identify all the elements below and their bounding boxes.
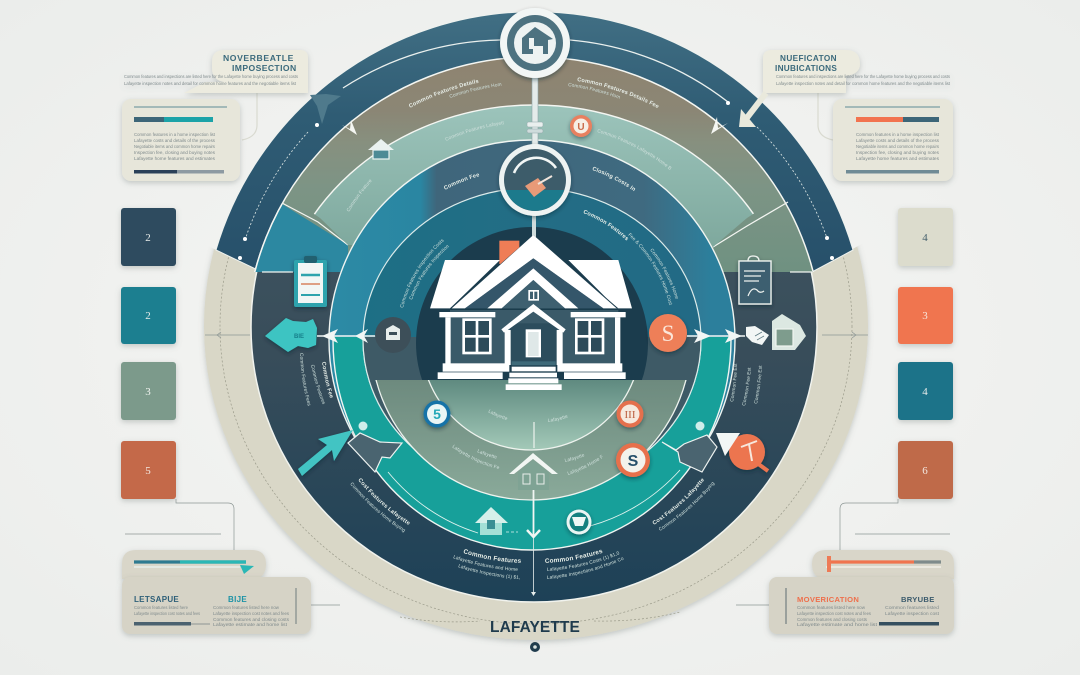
infographic canvas	[118, 6, 958, 652]
top right info card: Inspection fee, closing and buying notes	[856, 150, 940, 155]
icon: coral dollar: S	[662, 321, 674, 346]
icon: handshake	[746, 326, 769, 345]
left number tiles: 3	[145, 386, 151, 398]
icon: slate circle	[375, 317, 411, 353]
top right info card	[833, 99, 953, 181]
outer cream ring	[202, 246, 870, 644]
bottom left card: Common features listed here	[134, 605, 188, 610]
icon: coral dollar badge	[616, 443, 650, 477]
brand title: LAFAYETTE	[490, 619, 580, 636]
top left info card: Lafayette home features and estimates	[134, 156, 216, 161]
top right info card: Negotiable items and common home repairs	[856, 144, 940, 149]
bracket: left lower notch	[348, 422, 402, 472]
right number tiles: 3	[922, 310, 928, 322]
brand decorative dashes	[400, 612, 680, 622]
top left inspection callout: Common features and inspections are listed here for the Lafayette home buying process and costs	[124, 74, 299, 79]
top right info card: Lafayette costs and details of the process	[856, 138, 940, 143]
curved labels: Common Features Details Fee	[578, 78, 658, 108]
arrow: right from centre	[687, 329, 745, 343]
curved labels: Lafayette Features and Home Costs	[453, 555, 518, 571]
icon: blue five badge	[424, 400, 450, 428]
icon: coral pointer	[716, 433, 768, 471]
side leader lines	[125, 332, 950, 605]
top left info card	[122, 99, 240, 181]
blue and teal ring	[329, 130, 735, 550]
curved labels: Lafayette Features Costs (1) $1,000	[547, 551, 620, 572]
bottom right card: MOVERICATION	[797, 595, 859, 604]
top left info card: Negotiable items and common home repairs	[134, 144, 216, 149]
bottom left card: BIJE	[228, 595, 247, 604]
curved labels: Common Fees	[444, 174, 480, 190]
curved labels: Lafayette	[477, 449, 497, 458]
curved labels: Common Features Lafayette Home Buying	[598, 129, 672, 170]
right number tiles	[898, 208, 953, 499]
curved labels: Lafayette	[564, 454, 584, 462]
curved labels: Common Features	[464, 549, 521, 563]
bottom right card: Lafayette inspection cost	[885, 611, 940, 616]
dark centre circle	[416, 227, 648, 459]
curved labels: Common Features Home	[650, 248, 678, 299]
icon: centre small house	[509, 453, 558, 490]
badge: coral upper	[570, 115, 592, 137]
icon: hexagon box	[772, 314, 806, 350]
right number tiles: 4	[922, 232, 928, 244]
medallion: inspection brush icon	[499, 144, 571, 216]
left number tiles: 2	[145, 232, 151, 244]
top left inspection callout	[124, 50, 308, 93]
medallion: top house icon	[500, 8, 570, 78]
top left inspection callout: Lafayette inspection notes and detail for common home features and the negotiable items list	[124, 81, 297, 86]
icon: teal left arrow	[265, 318, 317, 352]
lower sage disc	[375, 380, 687, 501]
arrow: down to lower ring	[527, 490, 540, 596]
bottom left card: Common features listed here now	[213, 605, 280, 610]
curved labels: Common Features	[545, 550, 602, 563]
bottom right card: Lafayette estimate and home list	[797, 622, 878, 627]
curved labels: Common Fee Est	[730, 364, 737, 402]
bottom left card: Lafayette inspection cost notes and fees	[213, 611, 290, 616]
curved labels: Common Features Lafayette	[445, 121, 504, 140]
lower slate ring	[250, 272, 818, 603]
top left inspection callout: IMPOSECTION	[232, 63, 297, 73]
top left info card: Inspection fee, closing and buying notes	[134, 150, 216, 155]
bottom left tab with arrow bar	[122, 550, 266, 579]
curved labels: Common Features Fees	[300, 353, 310, 406]
icon: star badge	[566, 510, 592, 534]
bottom left card: LETSAPUE	[134, 595, 179, 604]
card connector lines	[242, 93, 833, 140]
curved labels: Lafayette Inspections (1) $1,000	[458, 564, 520, 580]
icon: teal left arrow: BIE	[294, 334, 304, 340]
bottom right card: Common features listed here now	[797, 605, 866, 610]
curved labels: Common Features Inspection	[409, 245, 449, 300]
curved labels: Common Fee Est	[742, 368, 751, 406]
curved labels: Common Fee	[322, 362, 333, 398]
curved labels: Closing Costs Inspect	[592, 166, 636, 192]
left number tiles: 5	[145, 465, 151, 477]
top left info card: Lafayette costs and details of the process	[134, 138, 216, 143]
curved labels: Cost Features Lafayette	[652, 478, 704, 524]
central stem connector	[527, 76, 543, 238]
icon: clipboard left	[294, 256, 327, 307]
top left info card: Common features in a home inspection list	[134, 132, 216, 137]
top right info card: Lafayette home features and estimates	[856, 156, 940, 161]
arrow: notification pointer	[739, 93, 766, 127]
icon: small house upper left	[368, 139, 394, 159]
top right notification callout: Lafayette inspection notes and detail for common home features and the negotiable items list	[776, 81, 951, 86]
curved labels: Common Fee Est	[754, 366, 762, 404]
curved labels: Lafayette	[548, 415, 568, 422]
curved labels: Common Feature	[346, 180, 372, 212]
top left inspection callout: NOVERBEATLE	[223, 53, 294, 63]
curved labels: Lafayette Inspections and Home Cost	[547, 558, 624, 579]
top navy ring	[216, 12, 853, 272]
icon: coral dollar badge: S	[628, 453, 639, 470]
left number tiles: 2	[145, 310, 151, 322]
curved labels: Lafayette Home Fees	[567, 454, 602, 475]
bottom right card: BRYUBE	[901, 595, 935, 604]
curved labels: Fee & Common Features Home Cost	[628, 232, 672, 306]
curved labels: Common Features	[311, 364, 325, 404]
icon: coral tally badge: III	[624, 409, 636, 421]
brand dot	[530, 642, 540, 652]
bottom right tab with arrow bar	[812, 550, 954, 579]
bottom left card: Common features and closing costs	[213, 617, 290, 622]
bottom right card	[769, 577, 954, 634]
light teal band	[314, 104, 754, 247]
bottom right card: Lafayette inspection cost notes and fees	[797, 611, 872, 616]
icon: clipboard right	[739, 256, 771, 304]
top right notification callout: INUBICATIONS	[775, 64, 837, 73]
right number tiles: 4	[922, 386, 928, 398]
top right notification callout: Common features and inspections are listed here for the Lafayette home buying process and costs	[776, 74, 951, 79]
bracket: right lower notch	[662, 422, 717, 472]
curved labels	[300, 78, 762, 580]
icon: blue five badge: 5	[433, 406, 441, 422]
upper brown and sage band	[254, 58, 814, 273]
top right notification callout	[763, 50, 951, 93]
curved labels: Lafayette	[488, 410, 508, 420]
bottom right card: Common features and closing costs	[797, 617, 868, 622]
arrow: teal up right	[298, 430, 353, 476]
bottom right card: Common features listed	[885, 605, 939, 610]
right number tiles: 6	[922, 465, 928, 477]
central house illustration	[430, 235, 632, 390]
top right notification callout: NUEFICATON	[780, 54, 837, 63]
icon: coral tally badge	[616, 400, 644, 428]
inner blue disc	[362, 190, 702, 452]
left number tiles	[121, 208, 176, 499]
top right info card: Common features in a home inspection list	[856, 132, 940, 137]
bottom left card: Lafayette inspection cost notes and fees	[134, 611, 201, 616]
curved labels: Common Features Details	[409, 80, 478, 108]
bottom left card: Lafayette estimate and home list	[213, 622, 288, 627]
icon: navy pointer top left	[310, 94, 341, 124]
curved labels: Common Features Home Buying	[659, 482, 715, 530]
curved labels: Common Features Inspection Costs	[400, 239, 444, 308]
bottom left card	[122, 577, 311, 634]
curved labels: Common Features	[584, 210, 628, 240]
icon: coral dollar	[649, 314, 687, 352]
badge: coral upper: U	[577, 122, 585, 133]
curved labels: Common Features Home Buying	[350, 482, 406, 532]
arrow: left from centre	[317, 329, 376, 343]
curved labels: Lafayette Inspection Fee	[452, 444, 500, 469]
icon: teal house	[475, 507, 518, 535]
curved labels: Cost Features Lafayette	[358, 478, 410, 525]
